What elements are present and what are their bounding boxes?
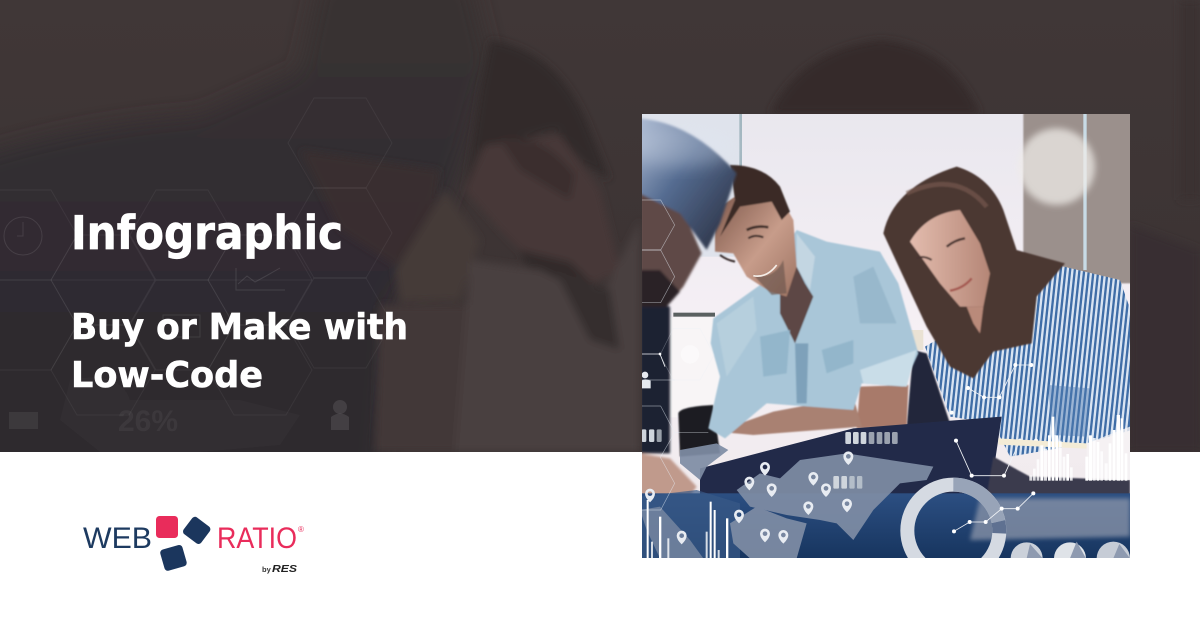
logo navy square — [159, 544, 188, 572]
left man silhouette — [0, 0, 490, 480]
left man's face — [393, 200, 431, 260]
subtitle: Buy or Make with — [71, 307, 408, 348]
thin hexagon overlays — [640, 200, 714, 510]
laptop — [700, 417, 1002, 495]
logo pink square — [156, 516, 178, 538]
middle man hair — [465, 40, 610, 190]
subtitle — [71, 307, 408, 396]
bar charts bottom left — [647, 500, 728, 558]
faint line chart icon — [236, 268, 285, 290]
woman's striped shirt — [925, 263, 1132, 457]
sofa — [678, 350, 950, 457]
logo word: WEB: WEB — [83, 522, 152, 555]
title: Infographic — [71, 206, 343, 260]
map pins — [645, 451, 853, 544]
woman's pocket — [1048, 385, 1090, 437]
darkened photo figures — [375, 41, 976, 452]
woman — [883, 167, 1065, 378]
faint hexagon network — [0, 98, 392, 415]
middle man face — [465, 135, 620, 285]
middle man shirt — [455, 220, 640, 452]
world map — [640, 443, 933, 558]
by label: by — [262, 565, 272, 574]
RES label: RES — [272, 563, 297, 575]
office background — [642, 114, 1130, 491]
notebook strip — [998, 427, 1130, 480]
woman's hair — [770, 40, 980, 114]
logo word: RATIO: RATIO — [217, 522, 297, 555]
faint world map — [60, 378, 300, 452]
faint person icon — [331, 400, 349, 430]
window wall patch — [394, 194, 474, 301]
faint clock icon — [4, 217, 42, 255]
laptop hand and band — [640, 457, 1130, 559]
left foreground man — [640, 118, 737, 510]
registered mark: ® — [298, 525, 304, 534]
bokeh circle — [681, 345, 699, 363]
faint percentage label: 26% — [118, 405, 178, 438]
network lines — [642, 353, 1038, 533]
woman's shoulder — [1130, 225, 1200, 452]
subtitle: Low-Code — [71, 355, 263, 396]
middle man — [708, 165, 918, 438]
smile — [753, 265, 777, 276]
faint monitor icon — [163, 315, 200, 337]
panel: team photo illustration — [623, 110, 1133, 577]
logo navy diamond — [182, 515, 212, 545]
panel: dark hero band with darkened photo — [0, 0, 1200, 480]
donut chart — [907, 485, 999, 577]
people icons — [642, 372, 898, 489]
pie charts — [1011, 542, 1130, 558]
logo: WebRatio by RES — [83, 515, 304, 575]
light flare — [623, 127, 737, 167]
bar charts right — [1029, 415, 1127, 481]
faint mail icon — [9, 412, 38, 429]
